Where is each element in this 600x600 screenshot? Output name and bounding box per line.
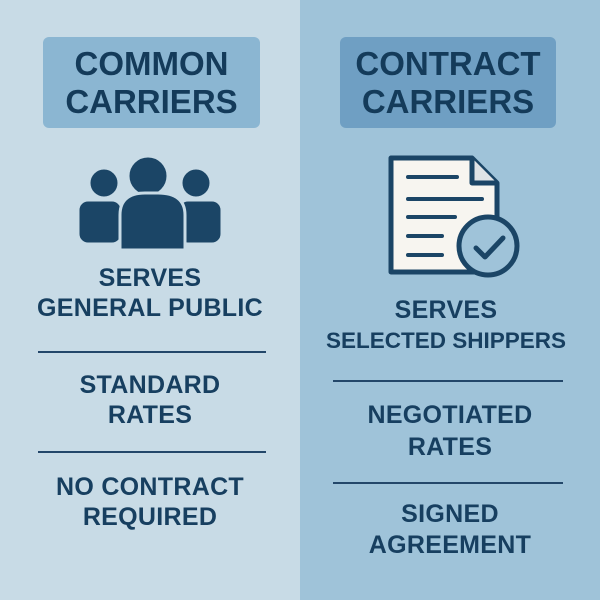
- text: no contract required: [56, 473, 244, 531]
- text: negotiated rates: NEGOTIATED: [367, 401, 533, 429]
- text: signed agreement: [369, 500, 531, 559]
- text: serves selected shippers: SELECTED SHIPPERS: [326, 328, 566, 353]
- heading: contract carriers: CONTRACT: [355, 45, 541, 82]
- icon: people group: [80, 158, 220, 248]
- text: no contract required: NO CONTRACT: [56, 473, 244, 501]
- text: serves selected shippers: [326, 296, 566, 353]
- heading: common carriers: COMMON: [74, 45, 228, 82]
- text: standard rates: RATES: [108, 401, 192, 429]
- text: negotiated rates: RATES: [408, 433, 492, 461]
- text: serves general public: GENERAL PUBLIC: [37, 294, 263, 322]
- text: standard rates: STANDARD: [80, 371, 220, 399]
- text: serves general public: [37, 264, 263, 322]
- heading: contract carriers: CARRIERS: [362, 83, 534, 120]
- heading: contract carriers: [340, 37, 556, 128]
- text: standard rates: [80, 371, 220, 429]
- text: serves selected shippers: SERVES: [395, 296, 497, 324]
- panel: common carriers: [0, 0, 300, 600]
- panel: contract carriers: [300, 0, 600, 600]
- text: negotiated rates: [367, 401, 533, 461]
- text: signed agreement: SIGNED: [401, 500, 499, 528]
- text: no contract required: REQUIRED: [83, 503, 217, 531]
- text: serves general public: SERVES: [99, 264, 201, 292]
- icon: document with check: [388, 156, 520, 278]
- text: signed agreement: AGREEMENT: [369, 531, 531, 559]
- heading: common carriers: CARRIERS: [65, 83, 238, 120]
- heading: common carriers: [43, 37, 260, 128]
